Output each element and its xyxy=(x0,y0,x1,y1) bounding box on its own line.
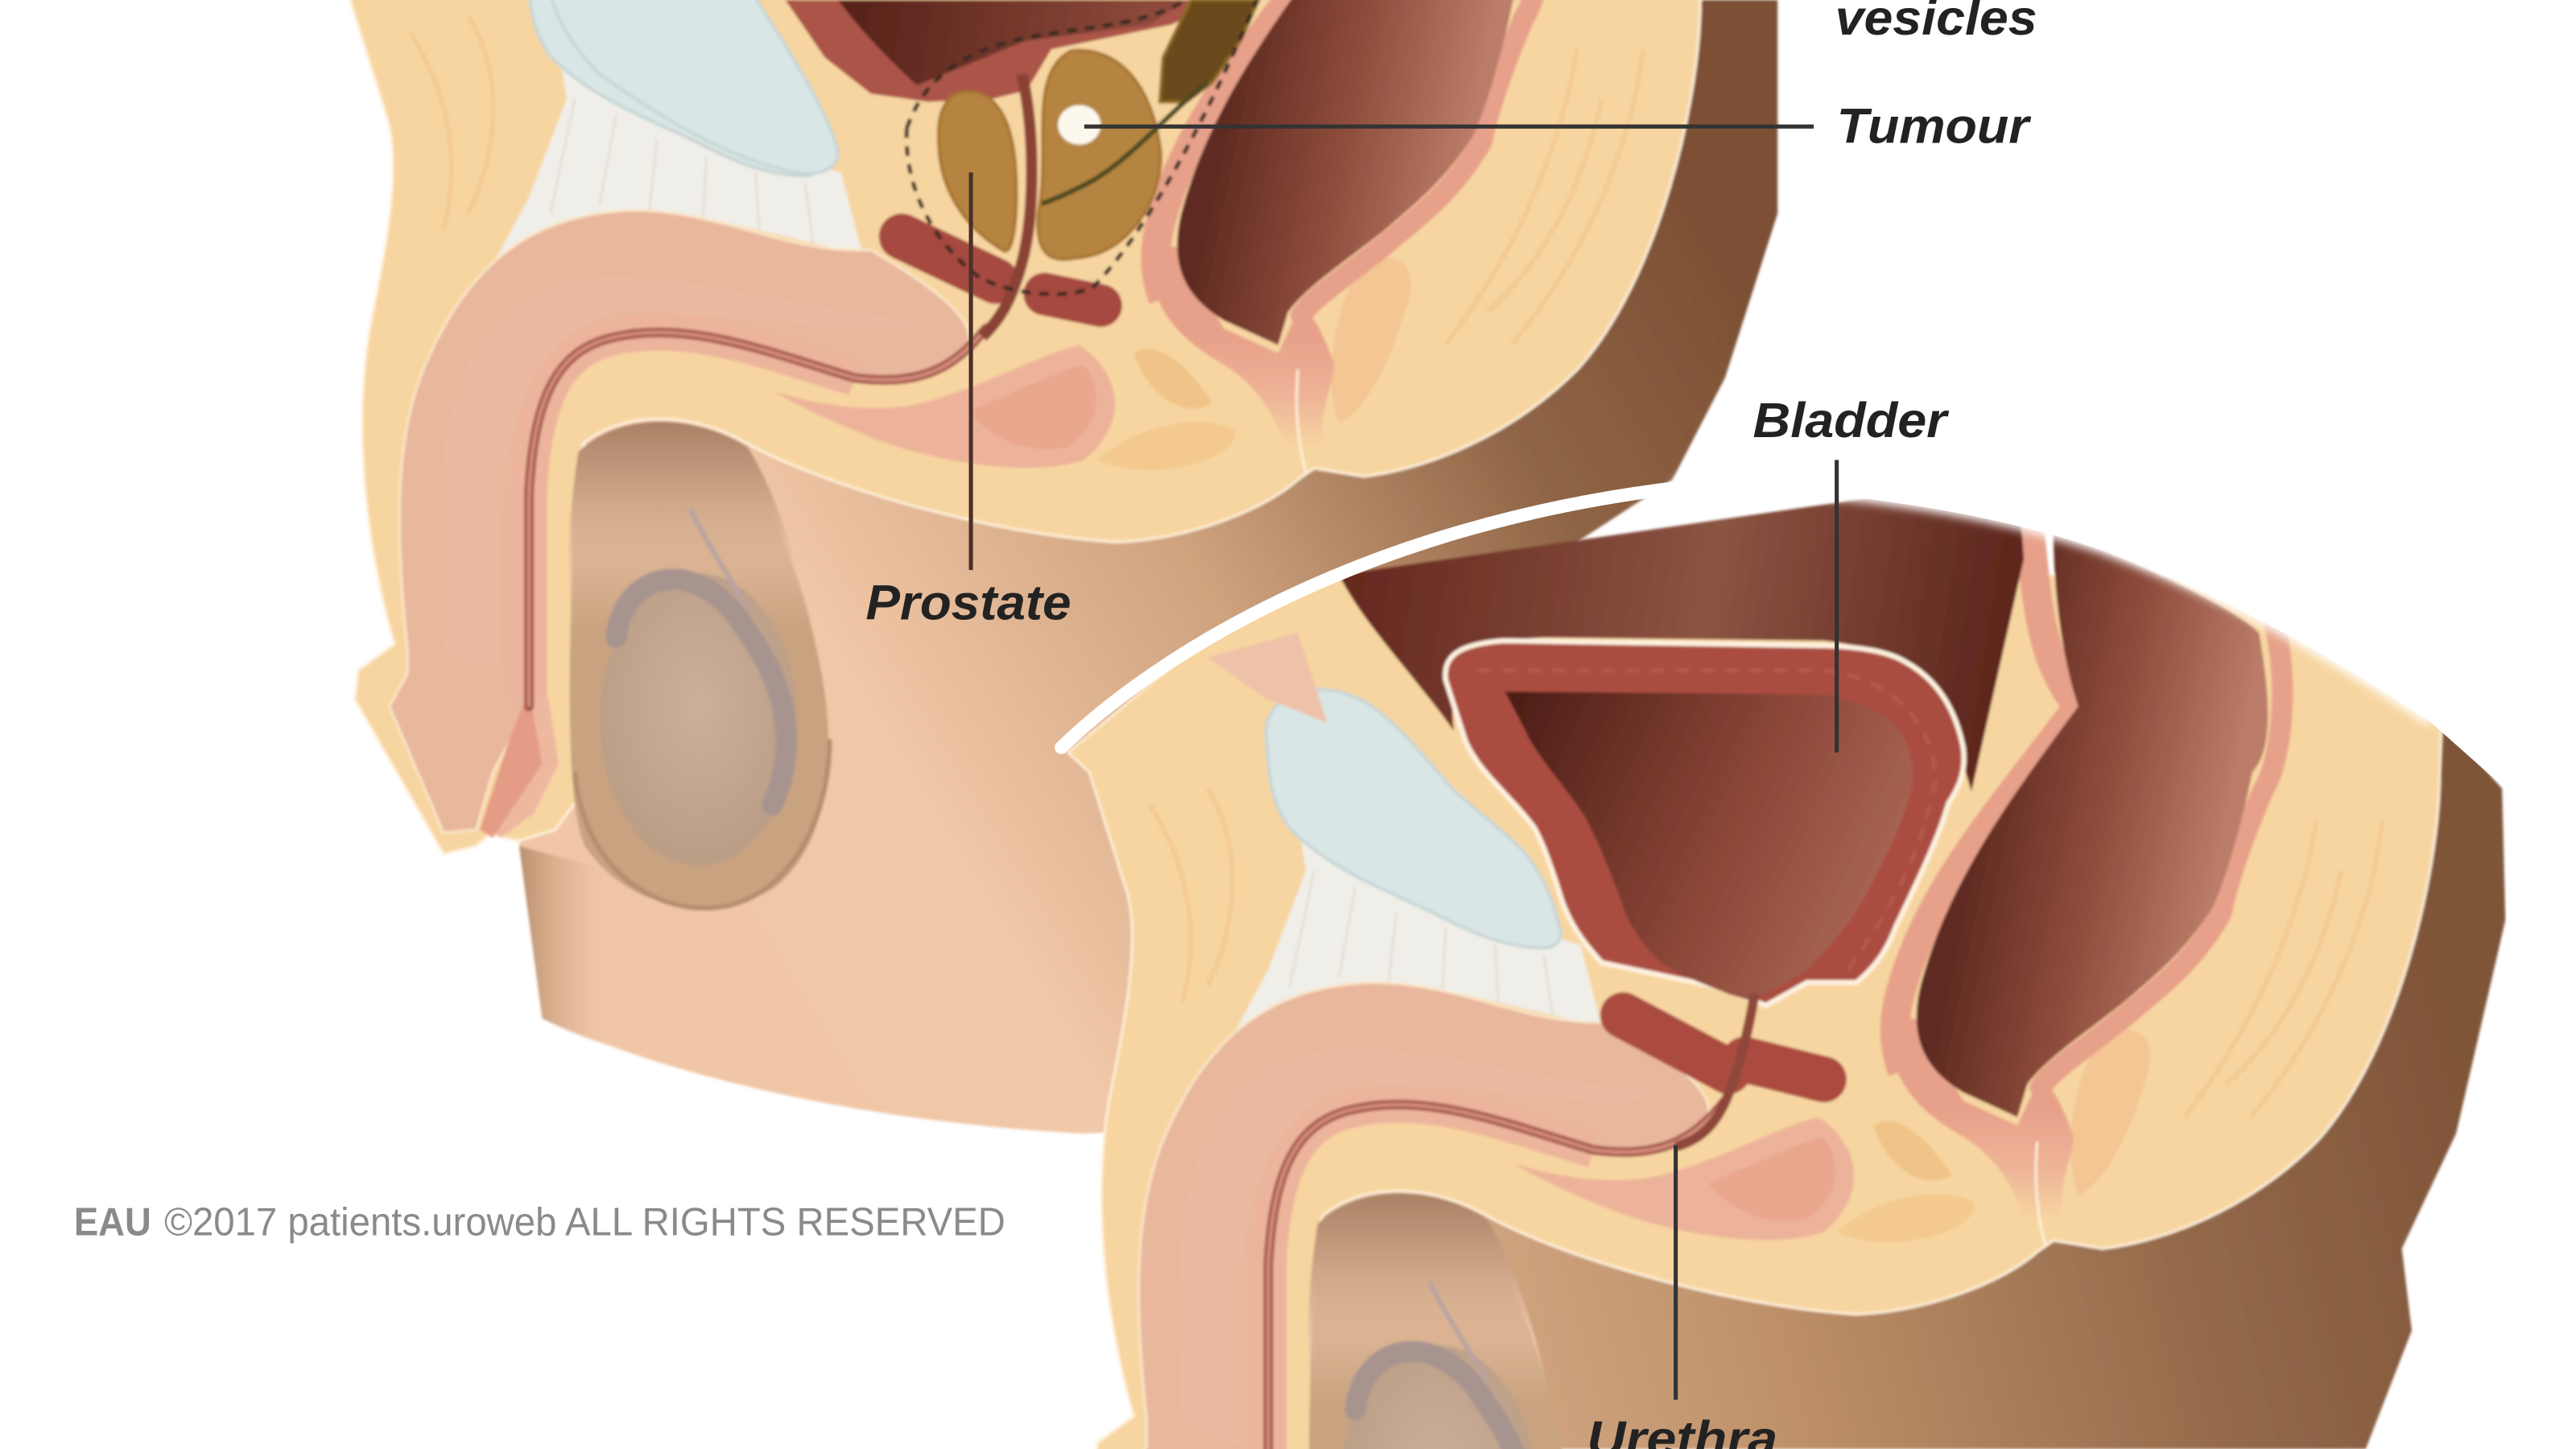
bladder lumen xyxy=(1505,691,1913,1001)
body section, same anatomy xyxy=(1068,526,2448,1449)
bladder lumen xyxy=(838,0,1186,85)
urinary sphincter xyxy=(1623,1015,1823,1080)
thigh and back skin xyxy=(519,0,1777,1133)
figure: healthy pelvis after treatment xyxy=(1068,477,2505,1449)
tumour xyxy=(1058,105,1100,145)
pubic bone, upper figure xyxy=(551,0,838,174)
dashed outline of prostate zone xyxy=(906,0,1257,294)
prostate right lobe xyxy=(1038,51,1161,259)
white arc separating the figures xyxy=(1061,488,1676,748)
label: prostate: Prostate xyxy=(866,575,1071,630)
figure: pelvis with prostate tumour xyxy=(328,0,1777,1133)
bladder wall, upper portion xyxy=(786,0,1224,102)
leader line: bladder xyxy=(1835,460,1838,753)
urethra xyxy=(1676,994,1755,1146)
vas deferens xyxy=(1042,82,1208,204)
prostate left lobe xyxy=(939,92,1016,251)
leader line: tumour xyxy=(1084,126,1814,127)
leader line: prostate xyxy=(970,172,972,570)
pubic skin patch xyxy=(1208,633,1327,723)
prostatic urethra xyxy=(982,74,1032,336)
bladder wall texture xyxy=(1479,671,1935,969)
body section: fat, bone, penis, scrotum, rectum xyxy=(328,0,1708,908)
leader line: urethra xyxy=(1674,1145,1677,1400)
seminal vesicle xyxy=(1160,0,1258,102)
shadow along the inner thigh edge xyxy=(519,846,611,1048)
urinary sphincter xyxy=(902,237,1100,306)
label: tumour: Tumour xyxy=(1837,99,2032,154)
abdominal cavity above bladder xyxy=(1339,477,2024,792)
copyright line: ©2017 patients.uroweb ALL RIGHTS RESERVED xyxy=(164,1201,1005,1245)
label: bladder: Bladder xyxy=(1753,393,1950,448)
bladder wall xyxy=(1445,641,1964,1005)
soft white fade along the upper edge of the second figure xyxy=(1676,485,2431,720)
copyright line: EAU xyxy=(74,1201,151,1245)
thigh and back skin xyxy=(1322,731,2507,1449)
